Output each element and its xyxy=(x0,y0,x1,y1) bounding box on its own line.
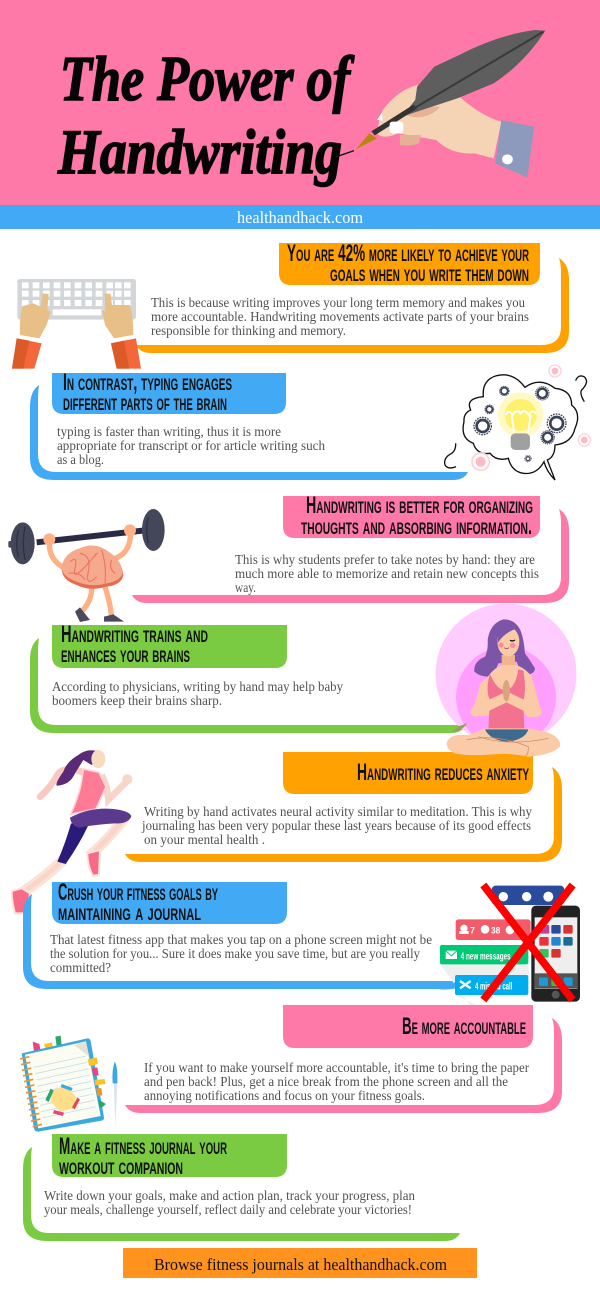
text block: meditation: Writing by hand activates neural activity similar to meditation. This is why xyxy=(144,805,532,820)
footer call to action xyxy=(123,1248,477,1278)
heading: typing xyxy=(52,369,286,416)
text block: paper and pen: and pen back! Plus, get a nice break from the phone screen and all the xyxy=(144,1075,508,1090)
heading: trains the brain xyxy=(52,621,287,668)
text block: memory: This is because writing improves your long term memory and makes you xyxy=(151,296,525,311)
text block: typing xyxy=(57,425,325,468)
text block: memory xyxy=(151,296,529,339)
text block: fitness app: committed? xyxy=(50,961,111,976)
text block: write down goals xyxy=(44,1189,415,1218)
icon: hand with quill pen xyxy=(337,30,545,177)
icon: hands typing on keyboard xyxy=(12,279,141,369)
panel: reduces anxiety xyxy=(125,752,562,862)
title xyxy=(57,43,355,187)
panel: organizing thoughts xyxy=(132,492,569,603)
text block: meditation xyxy=(141,805,532,848)
text block: fitness app: That latest fitness app that makes you tap on a phone screen might not be xyxy=(50,933,432,948)
heading: organizing thoughts xyxy=(283,492,540,540)
icon: crossed-out phone with notifications: 4 missed call xyxy=(475,981,512,992)
panel: typing xyxy=(30,369,468,480)
text block: typing: appropriate for transcript or for article writing such xyxy=(57,439,325,454)
text block: notes by hand: This is why students prefer to take notes by hand: they are xyxy=(235,553,535,568)
icon: crossed-out phone with notifications xyxy=(440,885,580,1005)
heading: fitness goals: maintaining a journal xyxy=(58,899,201,926)
heading: typing: In contrast, typing engages xyxy=(63,369,232,396)
text block: memory: responsible for thinking and memory. xyxy=(151,324,346,339)
text block: paper and pen: annoying notifications and focus on your fitness goals. xyxy=(144,1089,425,1104)
icon: crossed-out phone with notifications: 4 new messages xyxy=(461,951,511,962)
panel: trains the brain xyxy=(30,621,466,733)
text block: write down goals: your meals, challenge yourself, reflect daily and celebrate your victories! xyxy=(44,1203,412,1218)
text block: paper and pen: If you want to make yourself more accountable, it's time to bring the paper xyxy=(144,1061,529,1076)
heading: workout companion: workout companion xyxy=(59,1153,183,1180)
website bar: healthandhack.com xyxy=(237,208,363,227)
footer call to action: Browse fitness journals at healthandhack.com xyxy=(154,1255,447,1274)
icon: brain lifting barbell xyxy=(8,509,165,622)
icon: crossed-out phone with notifications: 38 xyxy=(491,925,500,935)
heading: typing: different parts of the brain xyxy=(63,389,227,416)
icon: notebook and pen xyxy=(20,1036,117,1132)
title: The Power of xyxy=(60,43,355,114)
icon: crossed-out phone with notifications: 7 xyxy=(470,925,475,935)
heading: workout companion: Make a fitness journal your xyxy=(59,1133,227,1160)
heading: reduces anxiety xyxy=(283,752,533,794)
text block: fitness app: the solution for you... Sure it does make you save time, but are you really xyxy=(50,947,420,962)
heading: fitness goals: Crush your fitness goals by xyxy=(58,879,218,906)
icon: woman running xyxy=(12,750,132,913)
title: Handwriting xyxy=(57,116,342,187)
heading: be more accountable xyxy=(283,1005,533,1048)
text block: physicians: boomers keep their brains sharp. xyxy=(52,694,222,709)
text block: typing: as a blog. xyxy=(57,453,104,468)
panel: be more accountable xyxy=(125,1005,562,1113)
text block: physicians: According to physicians, writing by hand may help baby xyxy=(52,680,343,695)
panel: 42% more likely xyxy=(136,240,569,353)
heading: 42% more likely xyxy=(279,240,540,287)
text block: paper and pen xyxy=(144,1061,529,1104)
text block: write down goals: Write down your goals, make and action plan, track your progress, plan xyxy=(44,1189,415,1204)
text block: memory: more accountable. Handwriting movements activate parts of your brains xyxy=(151,310,529,325)
website bar xyxy=(0,205,600,229)
text block: physicians xyxy=(52,680,343,709)
panel: workout companion xyxy=(23,1133,460,1241)
text block: notes by hand: way. xyxy=(235,581,256,596)
panel: fitness goals xyxy=(23,879,455,989)
heading: trains the brain: enhances your brains xyxy=(61,641,190,668)
header banner xyxy=(0,0,600,205)
heading: fitness goals xyxy=(52,879,287,926)
text block: fitness app xyxy=(50,933,432,976)
text block: notes by hand xyxy=(235,553,539,596)
text block: notes by hand: much more able to memorize and retain new concepts this xyxy=(235,567,539,582)
text block: meditation: on your mental health . xyxy=(144,833,265,848)
heading: trains the brain: Handwriting trains and xyxy=(61,621,208,648)
heading: workout companion xyxy=(52,1133,287,1180)
icon: meditating woman xyxy=(436,604,576,757)
icon: thought cloud with light bulb xyxy=(445,365,590,480)
text block: typing: typing is faster than writing, thus it is more xyxy=(57,425,281,440)
text block: meditation: journaling has been very popular these last years because of its good effects xyxy=(141,819,531,834)
